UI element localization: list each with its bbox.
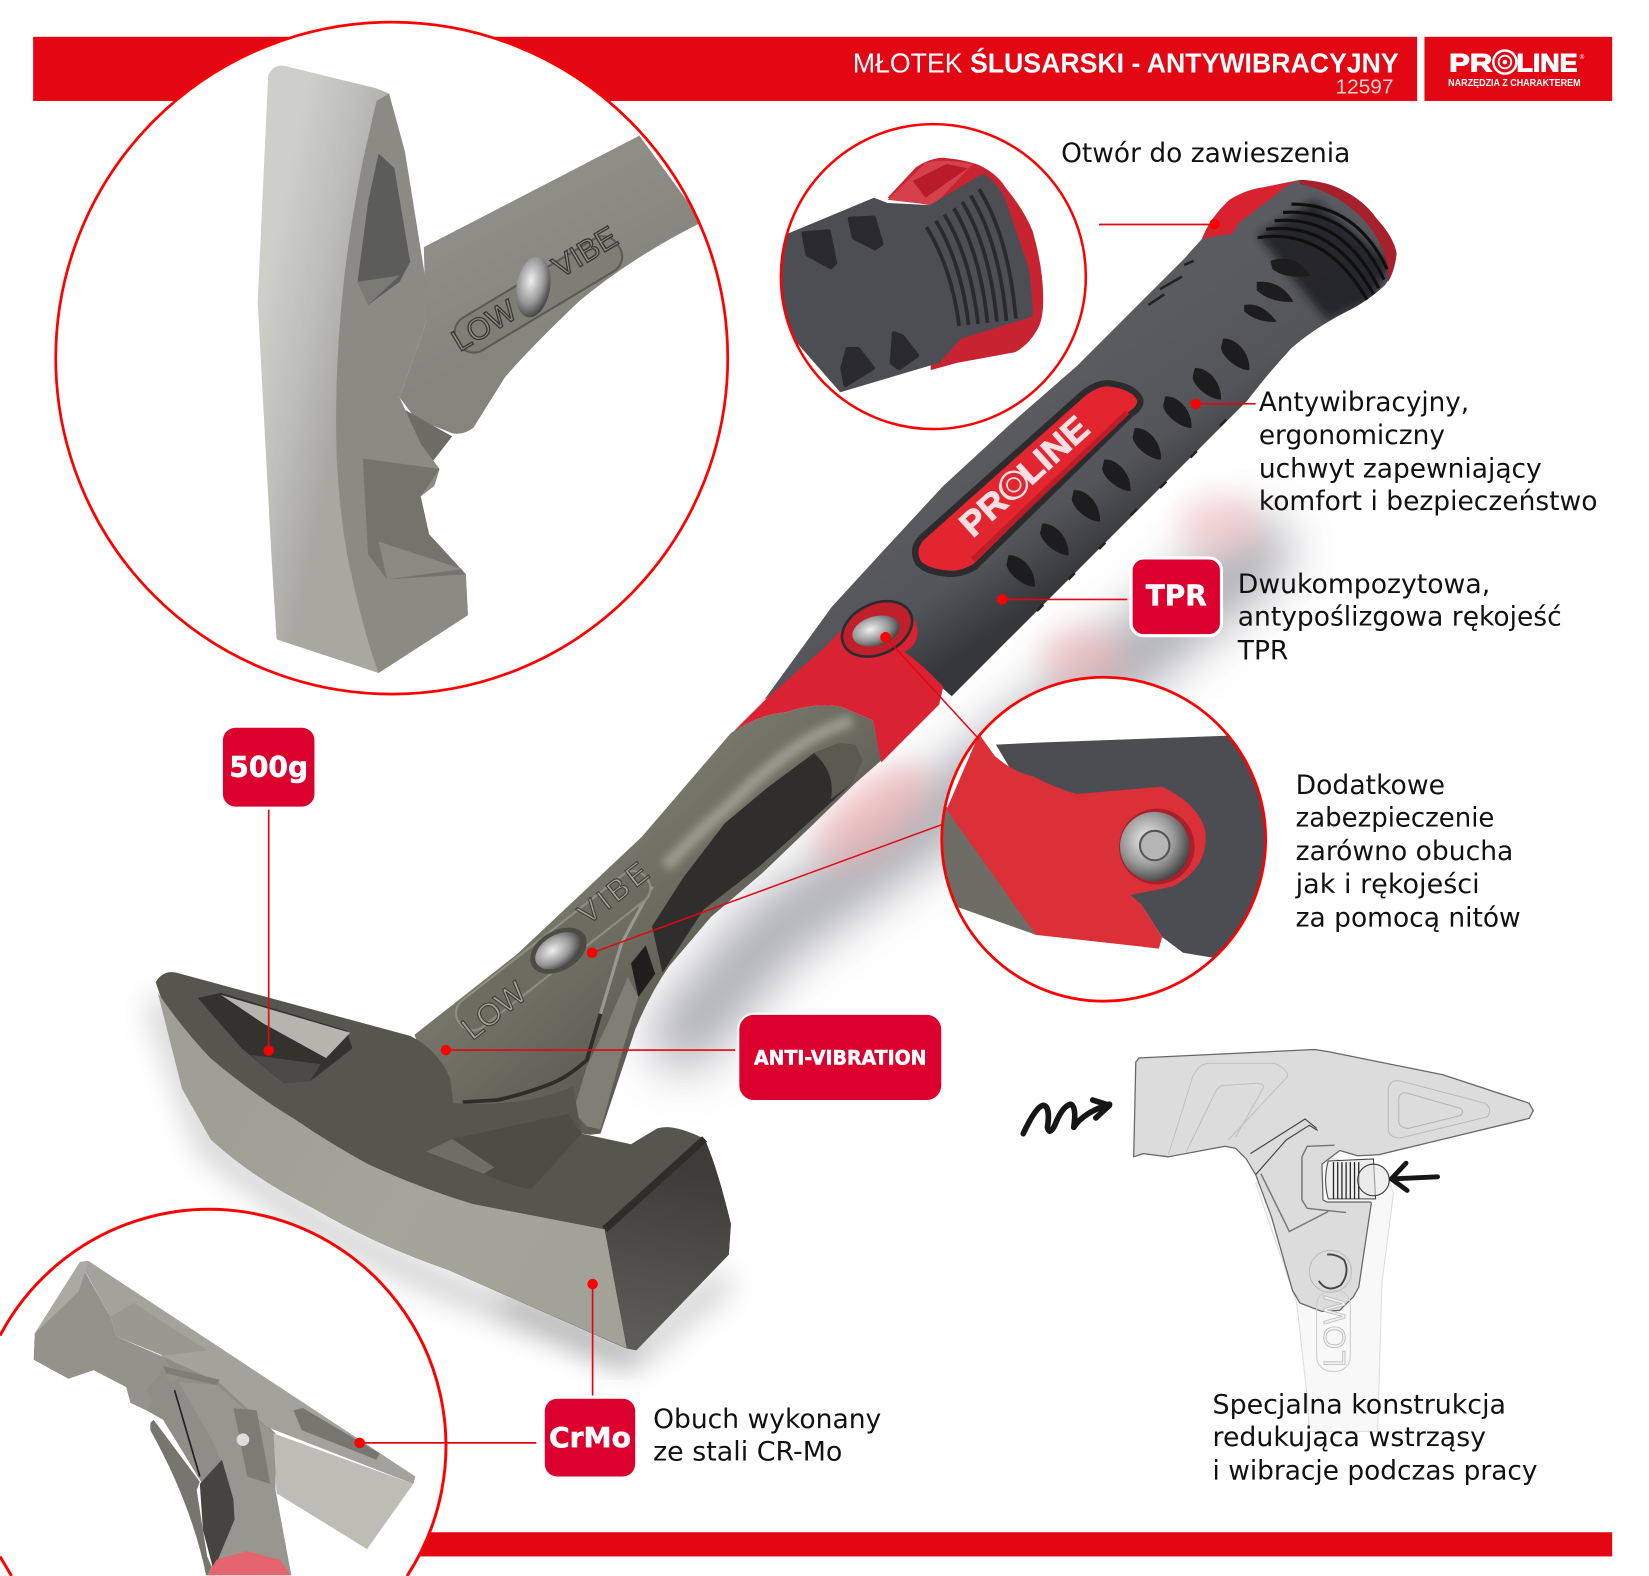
collar rivet: [833, 590, 921, 667]
leader: hanging hole: [1099, 219, 1220, 229]
label: TPR handle: [1237, 569, 1562, 666]
badge: CrMo: CrMo: [549, 1423, 631, 1454]
label: grip comfort: ergonomiczny: [1259, 420, 1445, 451]
badge: 500g: [223, 728, 314, 807]
dark opening: [200, 1460, 235, 1570]
badge: CrMo: [545, 1399, 635, 1477]
drop shadows: [158, 494, 1262, 1357]
arrow: pointing at spring: [1391, 1163, 1438, 1190]
rivet ring: [1309, 1250, 1351, 1292]
close-up LOW VIBE: LOW: [446, 293, 523, 358]
label: TPR handle: antypoślizgowa rękojeść: [1238, 602, 1562, 633]
handle: [179, 1382, 291, 1575]
label: rivets: [1295, 770, 1521, 934]
leader: grip: [1190, 399, 1256, 409]
red end cap: [888, 158, 1043, 370]
leader: lower inset: [354, 1438, 536, 1448]
label: rivets: zabezpieczenie: [1296, 803, 1494, 834]
head face: [273, 1433, 413, 1549]
inset: hammer from below: [0, 1209, 446, 1576]
inset: hammer head close-up: [56, 22, 728, 694]
leader: collar rivet: [880, 632, 979, 739]
logo block: NARZĘDZIA Z CHARAKTEREM: [1448, 78, 1581, 89]
dark grip body: [773, 174, 1033, 392]
rubber grip: [765, 180, 1397, 699]
label: TPR handle: TPR: [1237, 635, 1288, 666]
leader: TPR: [997, 594, 1127, 605]
hammer head: [156, 972, 731, 1350]
red collar: [733, 609, 943, 762]
label: TPR handle: Dwukompozytowa,: [1238, 569, 1490, 600]
label: rivets: jak i rękojeści: [1295, 869, 1480, 900]
label: grip comfort: [1259, 387, 1597, 517]
pink grip: [207, 1551, 291, 1575]
head slot outline: [1388, 1081, 1490, 1138]
top face: [80, 1261, 415, 1484]
label: rivets: za pomocą nitów: [1296, 903, 1521, 934]
pale handle: [1256, 1157, 1393, 1431]
inset: rivet close-up: [934, 677, 1273, 1001]
raised rib: [426, 1114, 582, 1189]
strut: [190, 1464, 200, 1480]
label: vibration reduction: Specjalna konstrukcja: [1213, 1389, 1506, 1420]
label: grip comfort: uchwyt zapewniający: [1259, 453, 1542, 484]
badge: 500g: 500g: [229, 751, 308, 784]
leader: shank rivet: [587, 824, 942, 958]
header bar: [33, 37, 1417, 101]
badge: ANTI-VIBRATION: [738, 1014, 942, 1101]
engraved LOW VIBE mark: VIBE: [572, 856, 655, 931]
engraved LOW VIBE mark: LOW: [454, 974, 533, 1047]
badge: ANTI-VIBRATION: ANTI-VIBRATION: [754, 1046, 927, 1069]
close-up head face: [258, 66, 389, 673]
red collar: [946, 734, 1206, 949]
label: grip comfort: komfort i bezpieczeństwo: [1259, 486, 1597, 517]
close-up LOW VIBE: [450, 225, 624, 354]
leader: anti-vibration: [441, 1045, 735, 1055]
diagram: hammer cross-section: [1134, 1050, 1533, 1431]
spring: [1326, 1159, 1389, 1199]
badge: TPR: [1131, 558, 1221, 636]
head outline: [1134, 1050, 1533, 1311]
logo block: ®: [1580, 53, 1585, 61]
ribs: [927, 189, 1016, 326]
lower strut: [150, 1420, 216, 1575]
label: rivets: zarówno obucha: [1296, 836, 1513, 867]
metal shank: [943, 807, 1036, 935]
badge: TPR: TPR: [1146, 580, 1207, 613]
rivet marks: [233, 1408, 270, 1484]
base silhouette: [126, 1357, 276, 1520]
head slot: [198, 993, 352, 1083]
label: vibration reduction: i wibracje podczas pracy: [1213, 1456, 1538, 1487]
cross rib: [163, 1366, 220, 1385]
leader: 500g: [263, 810, 274, 1056]
front plate edge: [600, 887, 652, 1014]
logo block: PR: [1449, 50, 1492, 78]
arrow: vibration squiggle: [1023, 1100, 1109, 1134]
label: vibration reduction: [1213, 1389, 1538, 1487]
red PROLINE label: [915, 383, 1140, 574]
label: hanging hole: Otwór do zawieszenia: [1061, 138, 1350, 169]
raised slab: [110, 1303, 207, 1356]
footer bar: [400, 1532, 1612, 1556]
LOW engraving: LOW: [1318, 1295, 1352, 1367]
leader: CrMo: [587, 1279, 598, 1396]
logo block: [1424, 37, 1612, 101]
joint lines: [1250, 1119, 1318, 1175]
hammer shank: [414, 705, 881, 1135]
close-up shank: [400, 136, 703, 434]
logo block: LINE: [1516, 50, 1577, 78]
grip end rim and hanging hole: [1202, 180, 1397, 321]
logo block: O: [1495, 50, 1514, 78]
red PROLINE label: PROLINE: [953, 409, 1097, 544]
label: rivets: Dodatkowe: [1296, 770, 1445, 801]
close-up LOW VIBE: VIBE: [547, 220, 624, 285]
main hammer: [156, 180, 1397, 1350]
claw: [34, 1262, 163, 1410]
hole pockets: [803, 218, 917, 385]
label: vibration reduction: redukująca wstrząsy: [1213, 1422, 1486, 1453]
label: CrMo head: [653, 1404, 881, 1468]
label: grip comfort: Antywibracyjny,: [1259, 387, 1469, 418]
label: CrMo head: Obuch wykonany: [653, 1404, 881, 1435]
close-up head side: [336, 94, 468, 673]
title: MŁOTEK ŚLUSARSKI - ANTYWIBRACYJNY: [853, 48, 1399, 79]
inset: grip end: [773, 124, 1086, 429]
rivet: [1119, 809, 1195, 884]
grip holes: [1006, 259, 1310, 611]
engraved LOW VIBE mark: [450, 856, 657, 1047]
product code: 12597: [1336, 77, 1393, 99]
strut piece: [573, 977, 638, 1129]
label: CrMo head: ze stali CR-Mo: [653, 1437, 842, 1468]
grip dark: [996, 734, 1273, 968]
